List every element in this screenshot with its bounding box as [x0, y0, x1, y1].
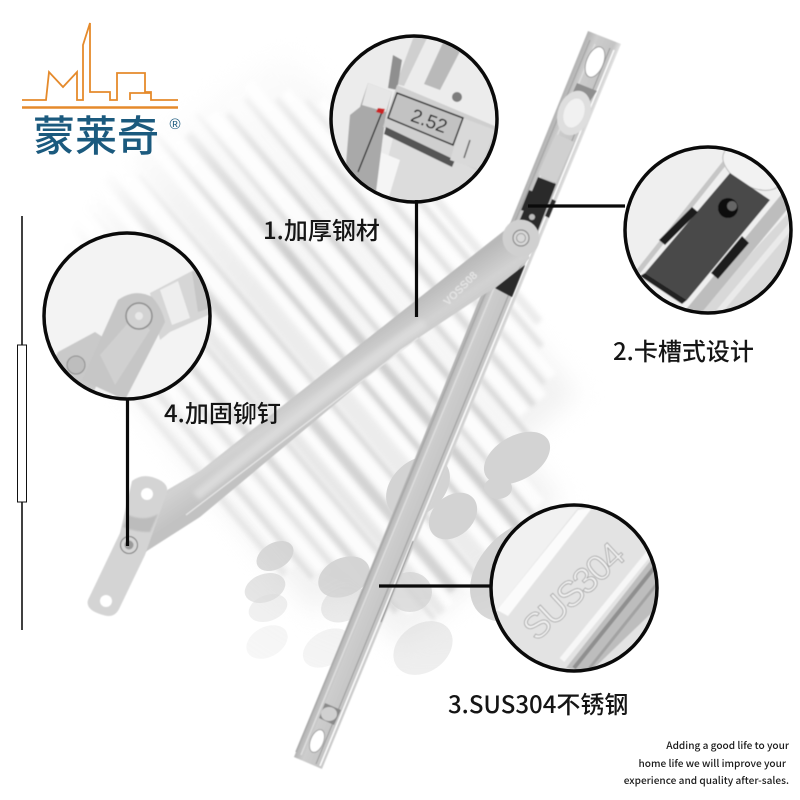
callout 1: caliper: 2.52 [408, 106, 450, 138]
product: long sliding rail [294, 31, 621, 769]
product: diagonal arm [125, 220, 540, 565]
footer slogan: Adding a good life to your [666, 737, 790, 752]
arm rib [196, 323, 425, 496]
callout 1: caliper [330, 36, 510, 210]
strap [150, 270, 208, 340]
callout 2: slot detail [623, 145, 793, 315]
bracket rivet [120, 536, 138, 554]
black slider [518, 177, 556, 233]
label 4: 4.加固铆钉 [164, 394, 281, 429]
footer slogan: home life we will improve your [638, 755, 787, 770]
logo [22, 23, 181, 164]
arm engraved mark: VOSS08 [441, 269, 480, 308]
label 2: 2.卡槽式设计 [613, 332, 754, 367]
logo registered mark: ® [169, 116, 181, 133]
tube end caps [244, 432, 550, 675]
pivot rivet [513, 230, 529, 246]
rail lower stop [319, 703, 341, 725]
lower plate [56, 332, 102, 390]
footer slogan: experience and quality after-sales. [624, 772, 789, 787]
leader line 2 [528, 204, 625, 208]
leader line 3 [379, 584, 490, 588]
label 1: 1.加厚钢材 [263, 211, 380, 246]
label 3: 3.SUS304不锈钢 [448, 685, 628, 720]
rail edges [296, 40, 590, 752]
left decorative bar [18, 216, 26, 630]
caliper screen [388, 93, 463, 145]
logo skyline icon [22, 23, 178, 108]
rivet head [126, 303, 152, 329]
rail top slot [581, 44, 609, 80]
background streaks [126, 102, 548, 620]
rail bottom slot [306, 727, 328, 755]
rail top roller [538, 83, 597, 183]
main link [96, 292, 165, 398]
logo wordmark: 蒙莱奇 [33, 103, 159, 164]
leader line 4 [126, 400, 129, 546]
background wash [160, 183, 565, 634]
callout 4: rivet detail [40, 230, 215, 402]
black wedge under arm [495, 265, 525, 297]
rail strip [638, 160, 727, 272]
background: steel tubes [119, 98, 565, 675]
tube behind caliper [389, 138, 477, 200]
footer slogan [624, 737, 790, 787]
leader line 1 [415, 200, 418, 317]
callout 3: SUS304 stamp [488, 502, 665, 674]
stamped text: SUS304 [514, 534, 633, 648]
caliper jaw [346, 86, 391, 191]
caliper body [383, 85, 495, 160]
product: end bracket [88, 476, 167, 616]
black insert [645, 173, 770, 300]
steel head [722, 150, 778, 192]
